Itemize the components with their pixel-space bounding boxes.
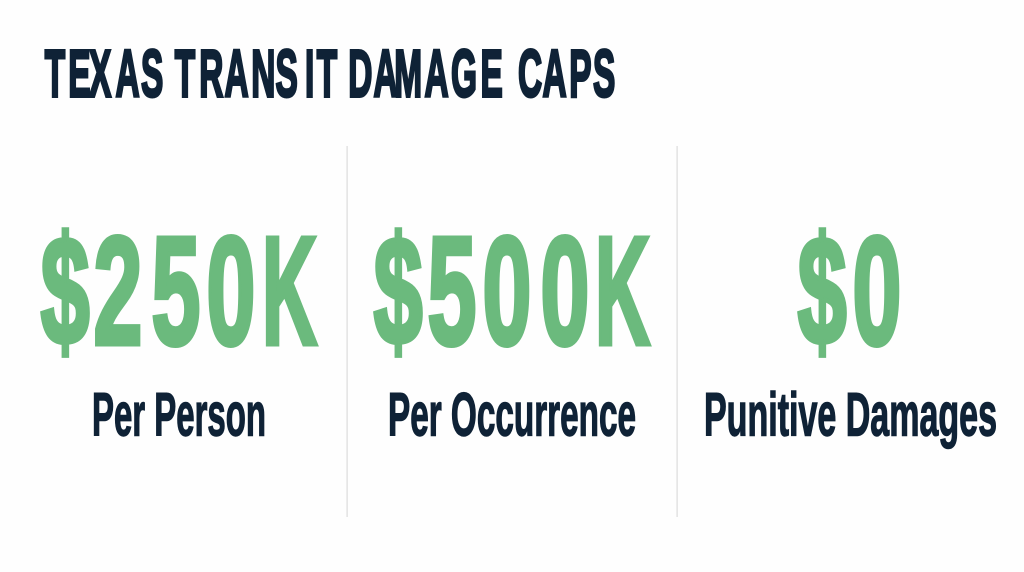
panel: per person — [41, 204, 317, 448]
amount: $250K: $250 — [41, 204, 255, 377]
panel: per occurrence — [374, 204, 650, 448]
label: Per Occurrence: Per Occurrence — [388, 380, 636, 448]
title: TEXAS TRANSIT DAMAGE CAPS — [45, 37, 615, 112]
amount: $500K: K — [595, 205, 650, 377]
amount: $0: $0 — [798, 204, 901, 377]
panel: punitive damages — [704, 204, 997, 448]
amount: $500K: $500 — [374, 204, 589, 377]
label: Per Person: Per Person — [92, 380, 266, 448]
amount: $250K: K — [262, 205, 317, 377]
